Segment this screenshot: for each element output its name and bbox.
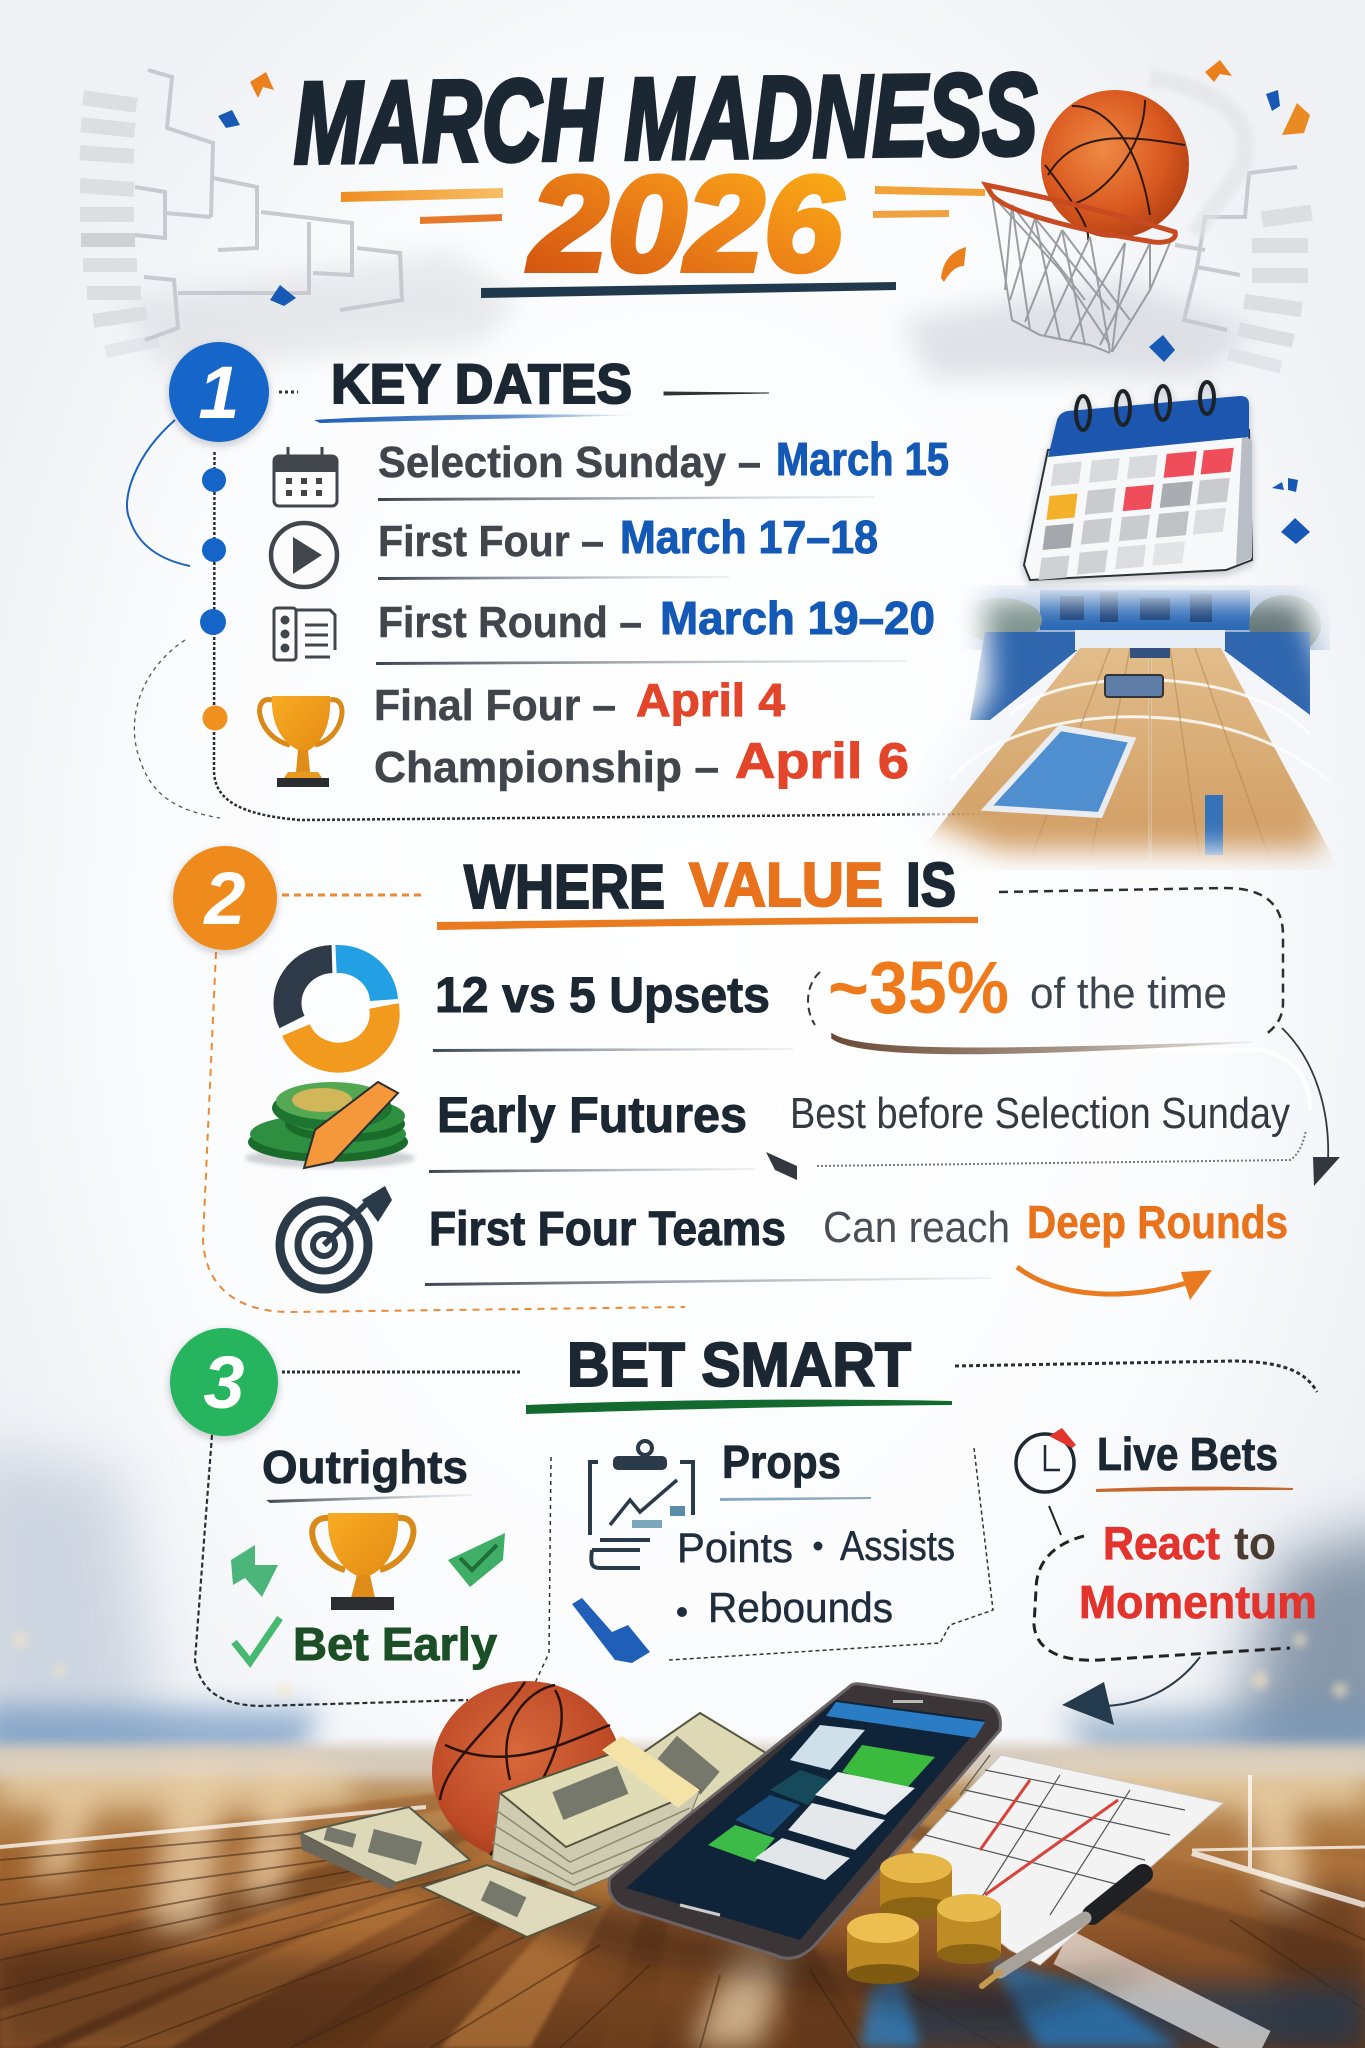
row: first four teams: First Four Teams — [429, 1203, 786, 1256]
number badge 3: 3 — [203, 1341, 245, 1424]
number badge 3 — [170, 1328, 278, 1436]
number badge 2: 2 — [202, 857, 246, 940]
wood court floor — [0, 1745, 1365, 2048]
icon: clipboard chart — [590, 1441, 693, 1568]
panel: outrights — [231, 1441, 505, 1670]
panel: props: Props — [722, 1436, 841, 1488]
date: first round — [378, 592, 935, 647]
panel: outrights: Outrights — [262, 1441, 468, 1493]
timeline dots — [200, 468, 228, 730]
basketball — [432, 1681, 622, 1861]
cash back bill — [625, 1713, 766, 1850]
row: first four teams: Can reach — [823, 1203, 1010, 1252]
title: 2026: 2026 — [527, 150, 844, 299]
gold coin stacks — [847, 1853, 1001, 1984]
icon: donut chart — [287, 959, 385, 1058]
heading: bet smart: BET SMART — [567, 1331, 911, 1400]
connectors — [203, 888, 1328, 1312]
date: first round: March 19–20 — [660, 592, 935, 644]
date: first four: First Four – — [378, 517, 604, 566]
basketball and hoop — [986, 90, 1189, 353]
connectors — [195, 1361, 1317, 1706]
row: 12 vs 5 upsets — [433, 967, 793, 1052]
icon: blue block — [572, 1598, 650, 1663]
icon: stacked money coins — [245, 1082, 415, 1168]
row: first four teams: Deep Rounds — [1027, 1196, 1288, 1248]
row: 12 vs 5 upsets: 12 vs 5 Upsets — [435, 967, 770, 1023]
stat: 35 percent of the time: of the time — [1030, 969, 1227, 1018]
pen — [982, 1874, 1143, 1986]
stat: 35 percent of the time — [828, 946, 1251, 1054]
arrow: orange to deep rounds — [1017, 1267, 1212, 1300]
panel: props: Assists — [840, 1522, 955, 1569]
row: first four teams — [425, 1196, 1288, 1286]
date: final four: Final Four – — [374, 681, 616, 730]
icon: play button — [271, 523, 337, 587]
confetti top — [218, 60, 1310, 362]
decorative tournament bracket right — [1175, 167, 1313, 373]
date: first round: First Round – — [378, 598, 642, 647]
panel: live bets: to — [1234, 1517, 1276, 1569]
date: selection sunday: March 15 — [776, 433, 949, 485]
date: final four — [374, 674, 785, 730]
title accent lines — [341, 186, 985, 298]
heading: key dates: KEY DATES — [331, 352, 632, 415]
heading: where value is: VALUE — [689, 851, 883, 920]
date: first four: March 17–18 — [620, 511, 878, 563]
panel: props: Points — [677, 1524, 793, 1571]
timeline connectors — [127, 392, 1072, 820]
heading: where value is: IS — [906, 851, 956, 920]
heading: where value is: WHERE — [464, 853, 665, 922]
icon: target with arrow — [280, 1186, 392, 1289]
section 1: key dates — [127, 342, 1072, 820]
panel: live bets: Live Bets — [1097, 1428, 1278, 1480]
bet slip paper — [912, 1755, 1223, 1965]
calendar day cells — [1039, 448, 1234, 580]
section 2: where value is — [173, 846, 1340, 1312]
panel: props: Rebounds — [708, 1584, 893, 1631]
date: championship: Championship – — [374, 743, 719, 792]
date: first four — [378, 511, 878, 566]
arena court illustration — [900, 575, 1345, 870]
calendar illustration — [1024, 382, 1252, 580]
row: early futures: Early Futures — [437, 1087, 747, 1143]
date: championship — [374, 733, 909, 792]
number badge 2 — [173, 846, 277, 950]
calendar rings — [1076, 382, 1214, 430]
number badge 1 — [169, 342, 269, 442]
cash front bill — [422, 1865, 600, 1937]
icon: trophy — [260, 696, 342, 787]
icon: stopwatch — [1016, 1428, 1076, 1492]
row: early futures — [429, 1087, 1290, 1173]
floor plank wedges — [0, 1760, 1365, 2048]
tabletop scene: ball, cash, phone, coins, bet slip — [300, 1681, 1223, 2020]
date: championship: April 6 — [735, 733, 909, 789]
icon: gold trophy — [312, 1513, 413, 1610]
confetti near calendar — [1272, 478, 1310, 544]
heading: key dates — [314, 352, 769, 423]
icon: green check badges — [231, 1533, 505, 1597]
cash main stack — [492, 1736, 700, 1892]
icon: bracket list — [274, 608, 335, 660]
icon: calendar small — [274, 447, 337, 506]
heading: where value is — [437, 851, 978, 930]
stat: 35 percent of the time: ~35% — [828, 946, 1009, 1029]
white swoosh behind the hoop — [1150, 78, 1246, 235]
object shadow — [300, 1840, 1180, 2020]
check and label: bet early: Bet Early — [293, 1618, 497, 1670]
date: selection sunday — [378, 433, 949, 487]
cash left stack — [300, 1807, 470, 1890]
arrowheads — [766, 1152, 1340, 1186]
panel: props — [572, 1436, 955, 1663]
panel: live bets — [1016, 1428, 1317, 1628]
arrowhead: live bets — [1062, 1682, 1114, 1725]
section 3: bet smart — [170, 1328, 1317, 1725]
number badge 1: 1 — [198, 351, 240, 434]
decorative tournament bracket left — [80, 70, 402, 358]
date: final four: April 4 — [636, 674, 785, 726]
date: selection sunday: Selection Sunday – — [378, 438, 761, 487]
title: March Madness: MARCH MADNESS — [293, 49, 1038, 188]
panel: live bets: React — [1103, 1517, 1220, 1569]
row: early futures: Best before Selection Sunday — [790, 1089, 1290, 1138]
smartphone — [609, 1684, 1000, 1958]
panel: live bets: Momentum — [1079, 1576, 1317, 1628]
